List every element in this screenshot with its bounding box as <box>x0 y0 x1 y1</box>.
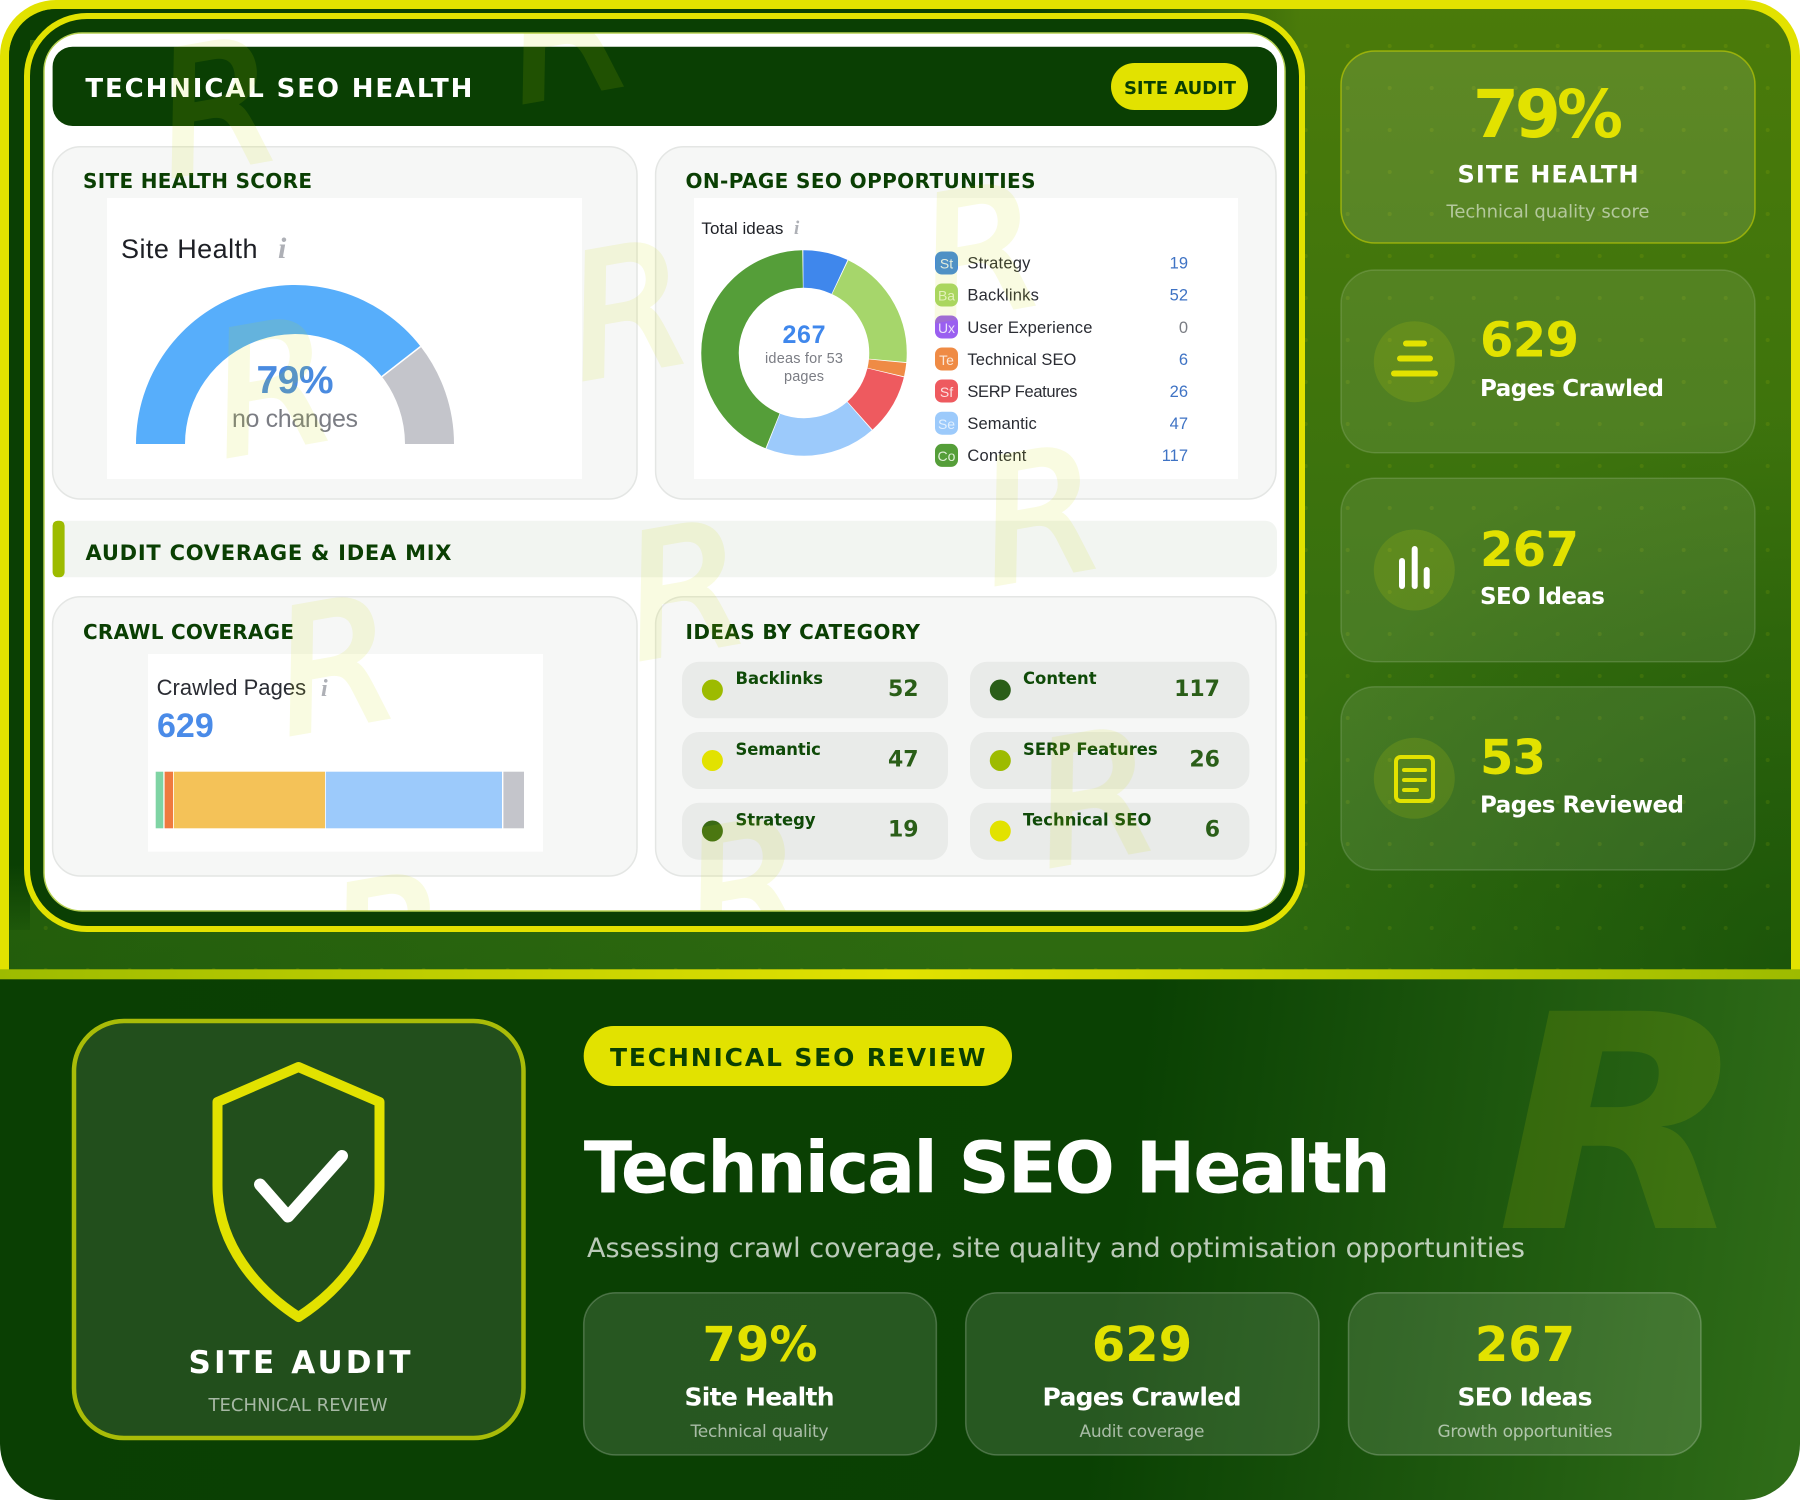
widget: site health gauge <box>107 198 582 479</box>
category: serp features: SERP Features <box>1023 740 1158 759</box>
header bar: TECHNICAL SEO HEALTH <box>85 74 472 104</box>
category: content: 117 <box>1174 677 1220 702</box>
bottom stat: seo ideas: 267 <box>1475 1317 1575 1373</box>
widget: crawled pages bar: 629 <box>157 707 214 745</box>
bottom stat: seo ideas <box>1348 1293 1701 1455</box>
widget: crawled pages bar: Crawled Pages <box>157 675 306 700</box>
heading: CRAWL COVERAGE <box>83 620 294 644</box>
legend: 117 <box>1162 447 1188 465</box>
legend: 6 <box>1179 351 1188 369</box>
stat card: seo ideas: 267 <box>1480 522 1579 578</box>
category: strategy: Strategy <box>736 811 816 830</box>
stat card: site health: 79% <box>1473 76 1623 153</box>
bottom stat: seo ideas: Growth opportunities <box>1438 1422 1613 1442</box>
legend: Te <box>939 352 954 368</box>
legend: Ux <box>938 320 955 336</box>
bottom stat: pages crawled: 629 <box>1092 1317 1192 1373</box>
category: semantic: Semantic <box>736 740 821 759</box>
watermark letters: R <box>610 484 761 700</box>
category: semantic: 47 <box>888 748 919 773</box>
section heading: audit coverage and idea mix <box>53 521 1277 577</box>
watermark letters: R <box>142 1 293 217</box>
legend: Ba <box>938 288 955 304</box>
watermark letters: R <box>315 836 466 1052</box>
stat card: pages reviewed <box>1341 687 1755 870</box>
tag: technical seo review: TECHNICAL SEO REVIEW <box>610 1043 986 1072</box>
icon: document <box>1374 738 1455 819</box>
bottom stat: site health: Site Health <box>684 1382 834 1412</box>
panel: site audit shield <box>74 1021 524 1438</box>
legend <box>935 252 1188 467</box>
category: strategy <box>682 803 948 860</box>
widget: total ideas donut <box>694 198 1238 479</box>
widget: crawled pages bar: i <box>321 676 328 702</box>
stat card: pages reviewed: 53 <box>1480 730 1546 786</box>
watermark letters: R <box>553 204 704 420</box>
top section background <box>0 0 1800 975</box>
watermark letters: R <box>905 146 1056 362</box>
widget: site health gauge: Site Health <box>121 234 258 264</box>
stat card: pages crawled: 629 <box>1480 313 1579 369</box>
widget: total ideas donut: ideas for 53 <box>765 351 843 367</box>
badge: site audit <box>1111 63 1248 110</box>
heading: ON-PAGE SEO OPPORTUNITIES <box>686 169 1036 193</box>
bottom section background <box>0 979 1800 1500</box>
legend: Sf <box>940 384 953 400</box>
bottom stat: site health <box>584 1293 936 1455</box>
legend: Semantic <box>967 415 1037 433</box>
category: technical seo: 6 <box>1205 818 1220 843</box>
watermark: large R: R <box>1496 951 1748 1298</box>
watermark letters: R <box>1020 691 1171 907</box>
legend: Technical SEO <box>967 351 1077 369</box>
icon: stacked lines <box>1374 321 1455 402</box>
section heading: audit coverage and idea mix: AUDIT COVERAGE & IDEA MIX <box>86 541 452 565</box>
icon: bar chart <box>1374 530 1455 610</box>
legend: Strategy <box>967 254 1031 272</box>
panel: crawl coverage <box>53 597 637 876</box>
widget: site health gauge: i <box>278 232 287 265</box>
main title: Technical SEO Health <box>584 1127 1391 1210</box>
legend: 0 <box>1179 319 1188 337</box>
category: content <box>970 662 1249 718</box>
watermark letters: R <box>197 281 348 497</box>
stat card: site health: Technical quality score <box>1446 202 1650 223</box>
main dashboard panel <box>24 13 1305 932</box>
legend: User Experience <box>967 319 1092 337</box>
category: technical seo <box>970 803 1249 860</box>
legend: St <box>940 256 953 272</box>
category: serp features <box>970 732 1249 789</box>
widget: site health gauge: no changes <box>232 405 358 433</box>
watermark letters <box>172 33 1151 911</box>
watermark letters: R <box>670 781 821 997</box>
panel: site audit shield: TECHNICAL REVIEW <box>208 1395 388 1416</box>
legend: 19 <box>1170 254 1188 272</box>
stat card: site health <box>1341 51 1755 243</box>
stat card: pages crawled <box>1341 270 1755 453</box>
header bar <box>53 47 1277 126</box>
watermark letters: R <box>965 409 1116 625</box>
bottom stat: pages crawled <box>966 1293 1319 1455</box>
category: semantic <box>682 732 948 789</box>
bottom stat: site health: 79% <box>703 1317 817 1373</box>
legend: 47 <box>1170 415 1188 433</box>
legend: SERP Features <box>967 383 1077 401</box>
stat card: pages reviewed: Pages Reviewed <box>1480 793 1684 819</box>
icon: shield with check <box>218 1067 380 1317</box>
bottom stat: seo ideas: SEO Ideas <box>1458 1382 1592 1412</box>
legend: Content <box>967 447 1027 465</box>
widget: total ideas donut: pages <box>784 369 824 385</box>
heading: SITE HEALTH SCORE <box>83 169 312 193</box>
category: strategy: 19 <box>888 818 919 843</box>
panel: ideas by category <box>656 597 1276 876</box>
stat card: seo ideas: SEO Ideas <box>1480 584 1605 610</box>
legend: Co <box>938 448 956 464</box>
subtitle: Assessing crawl coverage, site quality and optimisation opportunities <box>587 1233 1525 1264</box>
bottom stat: pages crawled: Pages Crawled <box>1042 1382 1242 1412</box>
panel: site health score <box>53 147 637 499</box>
category: content: Content <box>1023 669 1097 688</box>
category: serp features: 26 <box>1189 748 1220 773</box>
widget: total ideas donut: i <box>794 218 800 239</box>
tag: technical seo review <box>584 1026 1012 1086</box>
separator strip <box>0 969 1800 979</box>
badge: site audit: SITE AUDIT <box>1124 78 1237 99</box>
widget: total ideas donut: 267 <box>782 321 826 349</box>
stat card: site health: SITE HEALTH <box>1458 161 1638 189</box>
legend: 52 <box>1170 287 1188 305</box>
panel: on-page seo opportunities <box>656 147 1276 499</box>
stat card: pages crawled: Pages Crawled <box>1480 376 1664 402</box>
category: technical seo: Technical SEO <box>1023 811 1151 830</box>
legend: Se <box>938 416 955 432</box>
category: backlinks <box>682 662 948 718</box>
widget: site health gauge: 79% <box>256 359 334 402</box>
legend: 26 <box>1170 383 1188 401</box>
panel: site audit shield: SITE AUDIT <box>188 1345 410 1381</box>
bottom stat: site health: Technical quality <box>690 1422 828 1442</box>
widget: total ideas donut: Total ideas <box>701 219 783 238</box>
widget: crawled pages bar <box>148 654 543 852</box>
heading: IDEAS BY CATEGORY <box>686 620 921 644</box>
category: backlinks: Backlinks <box>736 669 823 688</box>
watermark letters: R <box>260 559 411 775</box>
legend: Backlinks <box>967 287 1039 305</box>
category: backlinks: 52 <box>888 677 919 702</box>
stat card: seo ideas <box>1341 478 1755 662</box>
bottom stat: pages crawled: Audit coverage <box>1080 1422 1204 1442</box>
